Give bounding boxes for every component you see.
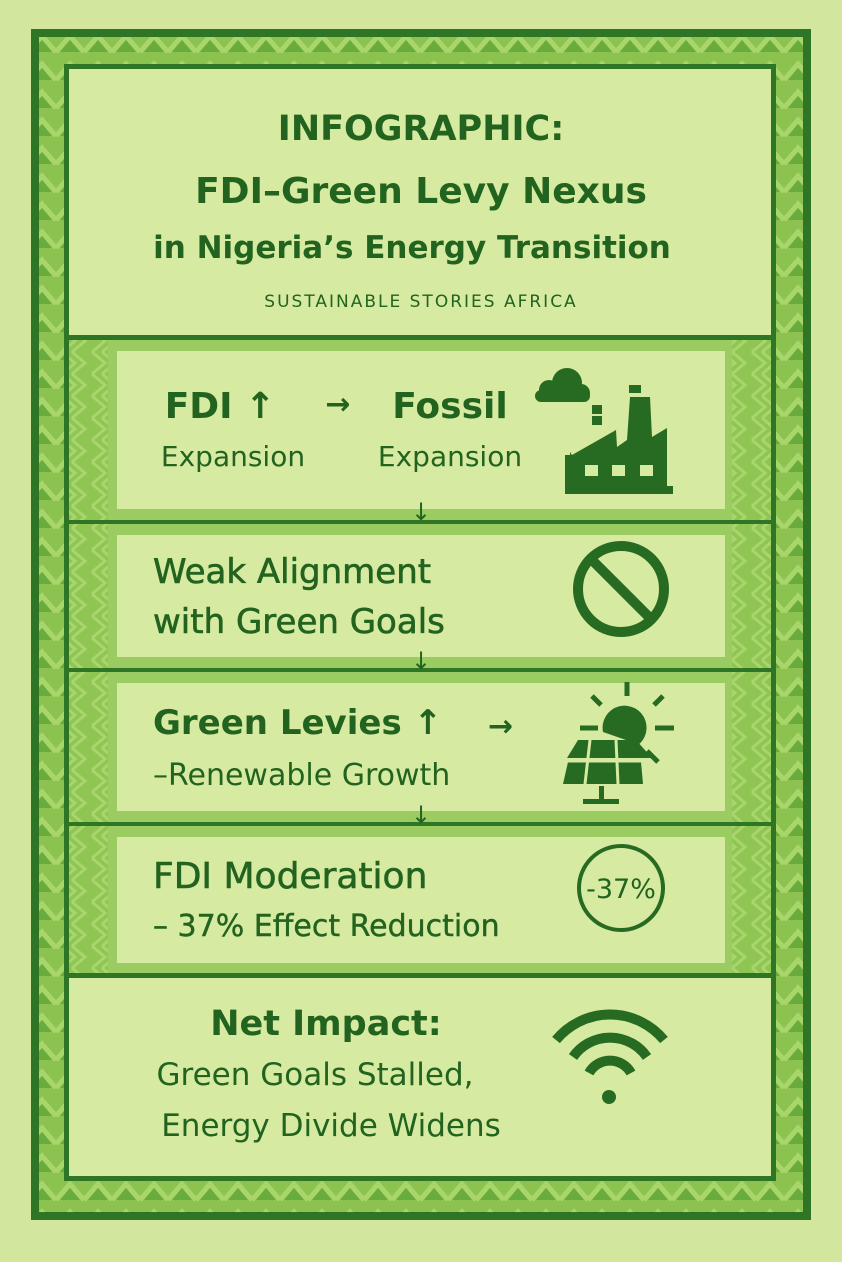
panel: green levies: –Renewable Growth (153, 758, 450, 793)
panel: FDI fossil: Fossil (392, 386, 508, 427)
panel: FDI moderation: – 37% Effect Reduction (153, 909, 500, 944)
panel: FDI fossil: FDI ↑ (165, 386, 275, 427)
panel: FDI moderation (117, 837, 725, 963)
title panel (153, 109, 671, 312)
icon: prohibition (578, 546, 664, 632)
title panel: INFOGRAPHIC: (278, 109, 564, 149)
panel: green levies: → (488, 709, 513, 744)
panel: weak alignment: with Green Goals (153, 602, 445, 642)
panel: green levies: Green Levies ↑ (153, 703, 442, 743)
panel: net impact: Green Goals Stalled, (156, 1057, 474, 1093)
icon: -37% badge (579, 846, 663, 930)
panel: net impact: Net Impact: (210, 1004, 442, 1044)
icon: wifi (556, 1015, 664, 1104)
panel: net impact: Energy Divide Widens (161, 1108, 501, 1144)
title panel: FDI–Green Levy Nexus (195, 171, 647, 212)
panel: FDI fossil: → (325, 387, 351, 422)
panel: net impact (156, 1004, 664, 1144)
icon: -37% badge: -37% (586, 874, 656, 905)
arrow: ↓ (411, 498, 431, 526)
arrow: ↓ (411, 801, 431, 829)
arrow: ↓ (411, 647, 431, 675)
title panel: SUSTAINABLE STORIES AFRICA (264, 292, 578, 312)
icon: solar (563, 682, 674, 804)
panel: FDI fossil: Expansion (378, 440, 522, 473)
panel: FDI fossil (117, 351, 725, 509)
panel: weak alignment: Weak Alignment (153, 552, 431, 592)
panel: FDI moderation: FDI Moderation (153, 856, 427, 897)
panel: FDI fossil: Expansion (161, 440, 305, 473)
panel: weak alignment (117, 535, 725, 657)
panel: green levies (117, 682, 725, 811)
title panel: in Nigeria’s Energy Transition (153, 230, 671, 266)
row bands (69, 335, 771, 978)
icon: factory (535, 368, 673, 494)
